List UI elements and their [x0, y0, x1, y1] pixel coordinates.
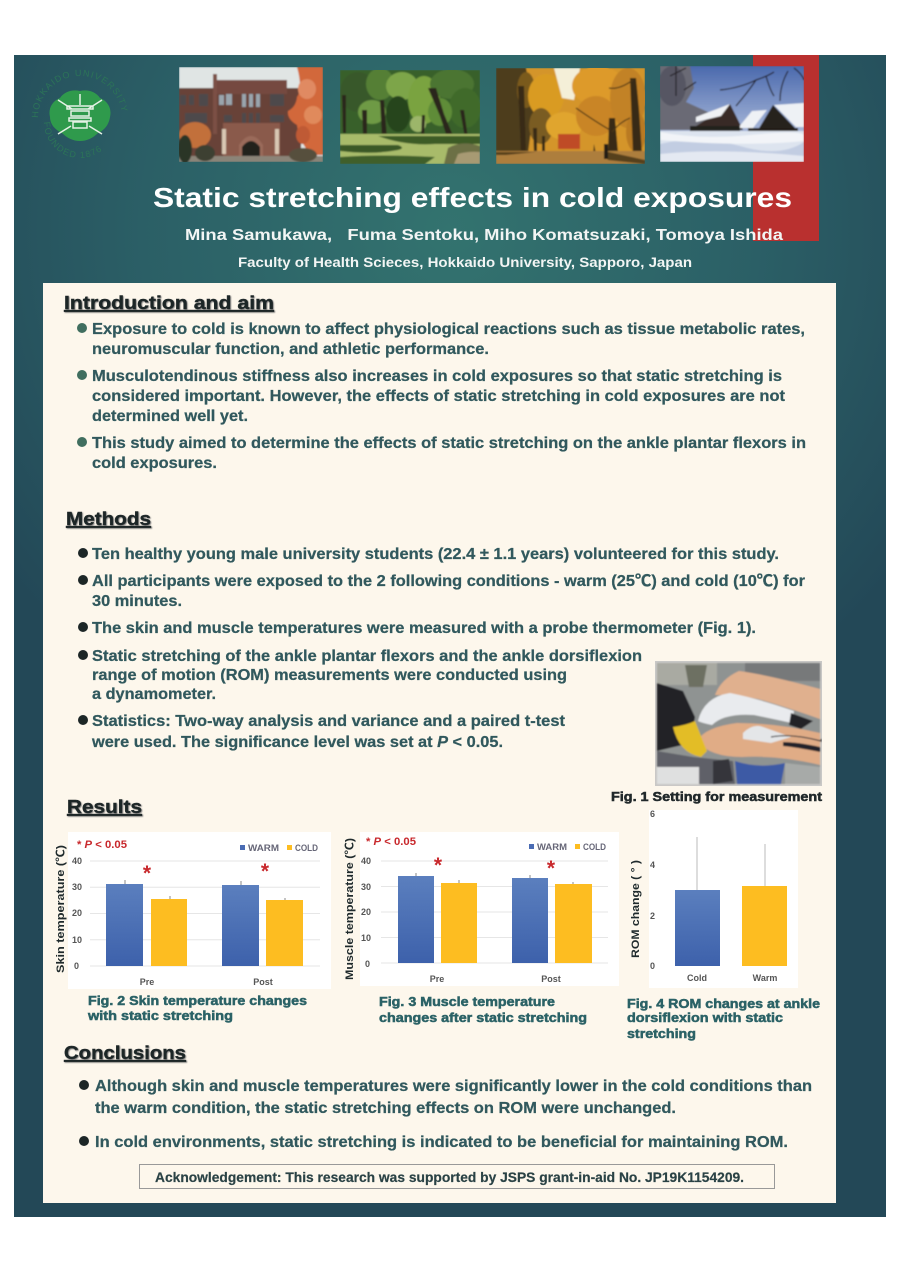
photo: green campus park — [340, 70, 480, 164]
heading: introduction: Introduction and aim — [64, 293, 274, 313]
bullet: aim — [77, 435, 806, 472]
bars: ROM change — [675, 837, 787, 966]
logo: Hokkaido University emblem — [32, 70, 128, 158]
legend: COLD — [583, 842, 606, 853]
legend — [240, 843, 318, 854]
bullet: aim: This study aimed to determine the effects of static stretching on the ankle plantar flexors in — [92, 435, 806, 452]
bars: skin temperature — [106, 880, 303, 966]
significance stars — [434, 854, 556, 880]
photo: snow-covered farmhouses — [660, 66, 804, 162]
bullet: conditions — [78, 573, 805, 610]
axis labels — [344, 838, 561, 984]
axis labels: 20 — [72, 908, 82, 918]
section: methods — [66, 509, 805, 751]
bullet: temperatures and ROM — [79, 1078, 812, 1117]
significance stars — [143, 860, 270, 885]
significance note: * P < 0.05 — [77, 839, 127, 851]
axis labels: Pre — [140, 977, 154, 987]
axis labels: ROM change ( ° ) — [630, 860, 642, 958]
caption: figure 3 — [379, 995, 587, 1025]
bullet: participants: Ten healthy young male university students (22.4 ± 1.1 years) volunteered for this study. — [92, 546, 779, 563]
significance stars: * — [143, 862, 152, 885]
caption: figure 2 — [87, 994, 307, 1023]
axis labels: 0 — [365, 959, 370, 969]
caption: figure 2: with static stretching — [87, 1009, 233, 1023]
axis labels: Warm — [753, 973, 777, 983]
significance stars: * — [434, 854, 443, 877]
axis labels: 30 — [361, 882, 371, 892]
photo: golden ginkgo avenue — [496, 68, 645, 164]
significance stars: * — [261, 860, 270, 883]
bullet: stretching protocol: range of motion (ROM) measurements were conducted using — [92, 667, 567, 684]
bullet: cold exposure — [77, 321, 805, 358]
bullet: stiffness — [77, 368, 786, 425]
axis labels: 10 — [72, 935, 82, 945]
bullet: stiffness: determined well yet. — [92, 408, 248, 425]
bullet: stretching protocol — [78, 648, 642, 703]
legend — [529, 842, 606, 853]
axis labels: 30 — [72, 882, 82, 892]
authors: Mina Samukawa, Fuma Sentoku, Miho Komatsuzaki, Tomoya Ishida — [185, 227, 783, 244]
heading: methods: Methods — [66, 509, 151, 529]
bullet: statistics: Statistics: Two-way analysis and variance and a paired t-test — [92, 713, 566, 730]
section: introduction and aim — [64, 293, 806, 472]
caption: figure 4 — [627, 997, 820, 1041]
bullet: temperatures and ROM: Although skin and muscle temperatures were significantly lower in the cold conditions than — [95, 1078, 812, 1095]
bars: muscle temperature — [398, 873, 592, 963]
caption: figure 3: Fig. 3 Muscle temperature — [379, 995, 555, 1009]
axis labels: 0 — [74, 961, 79, 971]
heading: results: Results — [67, 797, 142, 817]
heading: conclusions: Conclusions — [64, 1043, 186, 1063]
axis labels — [630, 809, 777, 983]
axis labels: 20 — [361, 907, 371, 917]
caption: figure 4: Fig. 4 ROM changes at ankle — [627, 997, 820, 1011]
bullet: statistics — [78, 713, 566, 751]
caption: figure 1: Fig. 1 Setting for measurement — [611, 790, 823, 804]
axis labels: Skin temperature (℃) — [55, 845, 67, 973]
caption: figure 4: stretching — [627, 1027, 696, 1041]
caption: figure 3: changes after static stretching — [379, 1011, 587, 1025]
bullet: conditions: 30 minutes. — [92, 593, 182, 610]
bullet: cold exposure: Exposure to cold is known to affect physiological reactions such as tissue metabolic rates, — [92, 321, 805, 338]
bullet: temperatures and ROM: the warm condition, the static stretching effects on ROM were unchanged. — [95, 1100, 676, 1117]
bullet: stiffness: considered important. However, the effects of static stretching in cold exposures are not — [92, 388, 786, 405]
chart: figure 4 ROM change — [630, 809, 798, 988]
axis labels: 6 — [650, 809, 655, 819]
section: conclusions — [64, 1043, 812, 1151]
bullet: conditions: All participants were exposed to the 2 following conditions - warm (25℃) and cold (10℃) for — [92, 573, 805, 590]
figure 1: measurement setting photo — [655, 661, 822, 786]
axis labels: Cold — [687, 973, 707, 983]
content panel — [43, 283, 836, 1203]
significance note: * P < 0.05 — [366, 836, 416, 848]
photo: university building in autumn — [179, 67, 323, 162]
red accent bar — [753, 55, 819, 241]
bullet: cold exposure: neuromuscular function, and athletic performance. — [92, 341, 489, 358]
significance stars: * — [547, 857, 556, 880]
logo: Hokkaido University emblem: HOKKAIDO UNIVERSITY — [32, 70, 128, 118]
bullet: benefit: In cold environments, static stretching is indicated to be beneficial for maintaining ROM. — [95, 1134, 788, 1151]
chart: figure 2 skin temperature — [55, 832, 331, 989]
caption: figure 2: Fig. 2 Skin temperature changes — [88, 994, 307, 1008]
title: Static stretching effects in cold exposures — [153, 182, 792, 213]
bullet: stretching protocol: Static stretching of the ankle plantar flexors and the ankle dorsiflexion — [92, 648, 642, 665]
axis labels: 40 — [361, 856, 371, 866]
axis labels: 40 — [72, 856, 82, 866]
chart: figure 3 muscle temperature — [344, 832, 619, 986]
axis labels: Muscle temperature (℃) — [344, 838, 356, 980]
axis labels: Post — [541, 974, 561, 984]
axis labels: 2 — [650, 911, 655, 921]
bullet: temperature measurement: The skin and muscle temperatures were measured with a probe thermometer (Fig. 1). — [92, 620, 756, 637]
axis labels: 0 — [650, 961, 655, 971]
axis labels: Pre — [430, 974, 444, 984]
logo: Hokkaido University emblem: FOUNDED 1876 — [44, 122, 101, 158]
affiliation: Faculty of Health Scieces, Hokkaido University, Sapporo, Japan — [238, 254, 692, 270]
axis labels: Post — [253, 977, 273, 987]
bullet: stiffness: Musculotendinous stiffness also increases in cold exposures so that static stretching is — [92, 368, 782, 385]
bullet: aim: cold exposures. — [92, 455, 217, 472]
caption: figure 4: dorsiflexion with static — [627, 1011, 783, 1025]
axis labels — [55, 845, 273, 987]
bullet: stretching protocol: a dynamometer. — [92, 686, 216, 703]
legend: COLD — [295, 843, 318, 854]
legend: WARM — [537, 842, 567, 853]
bullet: statistics: were used. The significance level was set at P < 0.05. — [91, 734, 503, 751]
acknowledgement box — [140, 1164, 774, 1188]
axis labels: 4 — [650, 860, 655, 870]
acknowledgement box: Acknowledgement: This research was supported by JSPS grant-in-aid No. JP19K1154209. — [155, 1169, 744, 1185]
axis labels: 10 — [361, 933, 371, 943]
legend: WARM — [248, 843, 279, 854]
